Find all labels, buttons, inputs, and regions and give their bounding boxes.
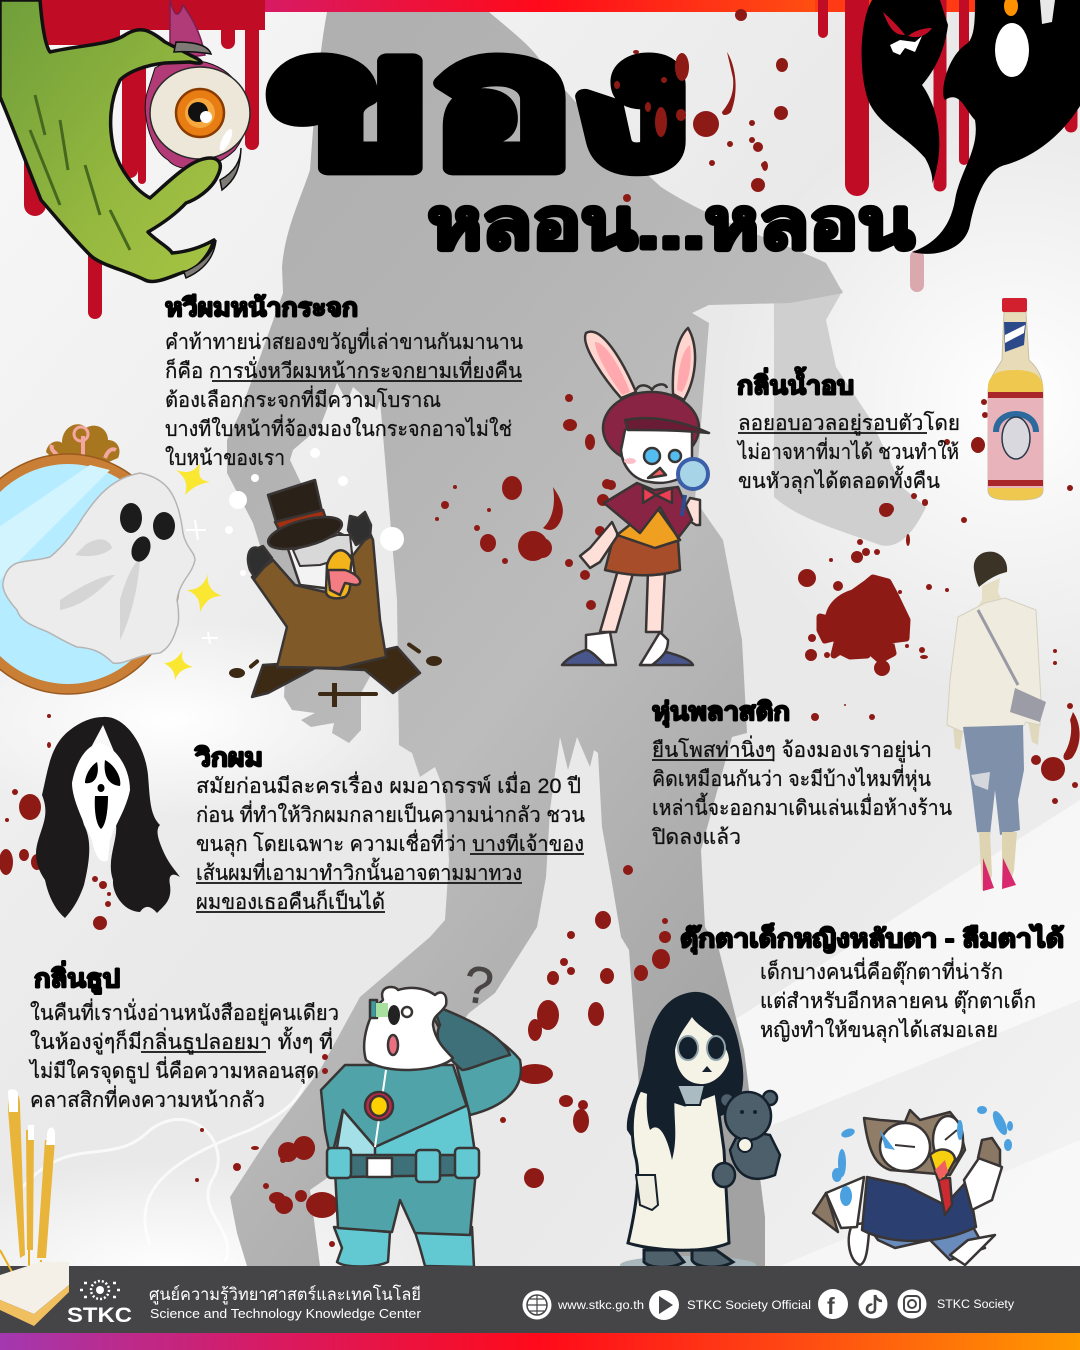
arm raised to head — [430, 1010, 521, 1115]
legs — [600, 570, 665, 632]
body text: เหล่านี้จะออกมาเดินเล่นเมื่อห้างร้าน — [652, 793, 952, 820]
face — [285, 529, 355, 590]
magnifier — [678, 459, 708, 489]
hand shape — [0, 0, 220, 281]
cape — [604, 483, 692, 538]
head — [364, 987, 453, 1070]
body text: ลอยอบอวลอยู่รอบตัวโดย — [738, 411, 960, 436]
icon: polar bear in teal suit — [321, 955, 521, 1267]
heading: ตุ๊กตาเด็กหญิงหลับตา - ลืมตาได้ — [680, 923, 1064, 955]
vest — [862, 1177, 976, 1241]
body text: ใบหน้าของเรา — [165, 446, 285, 470]
footer: facebook: f — [827, 1293, 835, 1319]
eye white — [150, 67, 250, 159]
body text: หญิงทำให้ขนลุกได้เสมอเลย — [760, 1018, 998, 1043]
body text — [651, 735, 952, 849]
body text: ในห้องจู่ๆก็มีกลิ่นธูปลอยมา ทั้งๆ ที่ — [30, 1027, 333, 1055]
bottom gradient bar — [0, 1333, 1080, 1350]
heading: วิกผม — [194, 744, 263, 772]
body text — [196, 771, 585, 914]
icon: incense sticks and holder — [0, 1089, 69, 1326]
dust dots — [225, 448, 404, 576]
body text: ขนลุก โดยเฉพาะ ความเชื่อที่ว่า บางทีเจ้าของ — [196, 829, 584, 857]
top hat — [268, 480, 325, 535]
legs — [979, 832, 1017, 890]
icon: ghost girl with teddy — [620, 992, 780, 1274]
panel: หวีผมหน้ากระจก — [165, 294, 523, 470]
body text: ไม่อาจหาที่มาได้ ชวนทำให้ — [736, 437, 959, 464]
sparkles — [164, 463, 222, 680]
body text: ปิดลงแล้ว — [651, 826, 741, 849]
body text: ต้องเลือกกระจกที่มีความโบราณ — [165, 385, 441, 412]
icon: perfume bottle — [988, 298, 1043, 500]
footer: facebook — [818, 1289, 848, 1319]
logo: STKC: STKC — [67, 1304, 132, 1327]
eyeball flesh — [145, 60, 247, 169]
body text — [28, 998, 339, 1112]
tie — [938, 1178, 952, 1215]
body text: ก็คือ การนั่งหวีผมหน้ากระจกยามเที่ยงคืน — [165, 356, 522, 383]
ghost eyes — [120, 503, 142, 533]
footer: youtube: STKC Society Official — [687, 1300, 811, 1312]
heading: หวีผมหน้ากระจก — [165, 294, 358, 322]
long hair front — [647, 1005, 738, 1160]
arm and hand — [580, 522, 618, 568]
gloves — [248, 512, 371, 578]
head — [864, 1110, 965, 1175]
heading: หุ่นพลาสติก — [652, 698, 790, 728]
body text: ไม่มีใครจุดธูป นี่คือความหลอนสุด — [28, 1056, 319, 1084]
legs — [865, 1222, 985, 1260]
hands — [953, 722, 1040, 750]
belt — [345, 1155, 465, 1177]
motion marks — [229, 642, 442, 707]
hair back — [627, 992, 743, 1150]
footer: organisation name: Science and Technology Knowledge Center — [150, 1307, 421, 1321]
icon: zombie hand holding eyeball — [0, 0, 250, 281]
ground shadow — [620, 1256, 756, 1274]
footer band — [0, 1266, 1080, 1333]
footer: website — [522, 1290, 644, 1320]
face — [621, 422, 692, 483]
body text: ก่อน ที่ทำให้วิกผมกลายเป็นความน่ากลัว ชวน — [196, 800, 585, 827]
sleeves and hand — [826, 1177, 864, 1228]
body text: ในคืนที่เรานั่งอ่านหนังสืออยู่คนเดียว — [30, 998, 339, 1026]
feet — [644, 1250, 733, 1267]
body text: เส้นผมที่เอามาทำวิกนั้นอาจตามมาทวง — [196, 858, 522, 885]
footer: organisation name — [149, 1284, 421, 1321]
question mark: ? — [460, 955, 497, 1017]
bow tie — [643, 487, 672, 503]
badge — [365, 1092, 393, 1120]
panel: ตุ๊กตาเด็กหญิงหลับตา — [680, 923, 1064, 1043]
footer: tiktok — [858, 1290, 888, 1318]
body text: แต่สำหรับอีกหลายคน ตุ๊กตาเด็ก — [760, 987, 1036, 1014]
face — [675, 1017, 729, 1084]
jeans — [963, 725, 1024, 835]
head and neck — [978, 578, 1004, 606]
footer: youtube — [649, 1290, 811, 1320]
boots — [334, 1227, 474, 1267]
title: หลอน...หลอน: หลอน...หลอน — [428, 185, 914, 263]
shorts — [605, 535, 680, 575]
body text: คำท้าทายน่าสยองขวัญที่เล่าขานกันมานาน — [165, 327, 523, 354]
legs — [335, 1170, 476, 1235]
eyeball stalk — [170, 0, 205, 60]
footer: organisation name: ศูนย์ความรู้วิทยาศาสตร์และเทคโนโลยี — [149, 1284, 421, 1305]
shoes — [562, 648, 693, 665]
icon: ghostface wig — [36, 717, 180, 918]
icon: rabbit detective — [562, 328, 709, 665]
vest — [617, 505, 680, 548]
body text: สมัยก่อนมีละครเรื่อง ผมอาถรรพ์ เมื่อ 20 ปี — [196, 771, 581, 798]
body text: บางทีใบหน้าที่จ้องมองในกระจกอาจไม่ใช่ — [165, 414, 512, 441]
legs — [252, 647, 420, 697]
beak — [930, 1150, 955, 1180]
iris — [176, 89, 224, 137]
footer: website: www.stkc.go.th — [557, 1300, 644, 1312]
icon: penguin in top hat — [225, 448, 442, 707]
panel: หุ่นพลาสติก — [651, 698, 952, 849]
panel: กลิ่นธูป — [28, 961, 339, 1112]
body text: คลาสสิกที่คงความหน้ากลัว — [30, 1085, 265, 1112]
body text: เด็กบางคนนี่คือตุ๊กตาที่น่ารัก — [760, 957, 1003, 985]
silhouette: grey ghost figure — [227, 12, 926, 1266]
torso — [321, 1065, 476, 1160]
title: ของ: ของ — [268, 0, 689, 204]
blood drips top right — [815, 0, 1080, 292]
teddy bear — [713, 1091, 780, 1187]
body text: ยืนโพสท่านิ่งๆ จ้องมองเราอยู่น่า — [652, 735, 932, 763]
coat — [252, 533, 386, 668]
body text: ผมของเธอคืนก็เป็นได้ — [196, 888, 385, 914]
collar and arm — [677, 1085, 705, 1105]
logo: STKC — [67, 1281, 132, 1327]
tears — [832, 1106, 1013, 1206]
body text — [760, 957, 1036, 1043]
cap — [974, 552, 1007, 587]
icon: black ghosts top right — [862, 0, 1080, 254]
beak and tongue — [326, 550, 352, 598]
icon: crying owl — [813, 1106, 1013, 1265]
panel: วิกผม — [194, 744, 585, 914]
icon: mannequin with bag — [947, 552, 1046, 891]
body text — [736, 411, 960, 494]
blood drips top left — [35, 0, 265, 312]
dress — [628, 1090, 729, 1250]
heading: กลิ่นธูป — [34, 961, 120, 995]
body text: ขนหัวลุกได้ตลอดทั้งคืน — [738, 466, 940, 494]
footer: instagram: STKC Society — [937, 1299, 1014, 1311]
mirror glass — [0, 464, 170, 684]
heading: กลิ่นน้ำอบ — [737, 366, 854, 400]
mirror frame — [0, 454, 180, 694]
shirt — [947, 598, 1041, 732]
icon: mirror with ghost — [0, 424, 222, 694]
mirror ornament — [46, 424, 120, 470]
hat — [603, 392, 699, 464]
body text — [165, 327, 523, 470]
body text: คิดเหมือนกันว่า จะมีบ้างไหมที่หุ่น — [652, 764, 931, 792]
footer: instagram — [898, 1290, 1014, 1318]
heels — [983, 858, 1016, 891]
ghost — [3, 473, 195, 663]
panel: กลิ่นน้ำอบ — [736, 366, 960, 494]
top gradient bar — [0, 0, 1080, 12]
ears — [585, 332, 636, 398]
